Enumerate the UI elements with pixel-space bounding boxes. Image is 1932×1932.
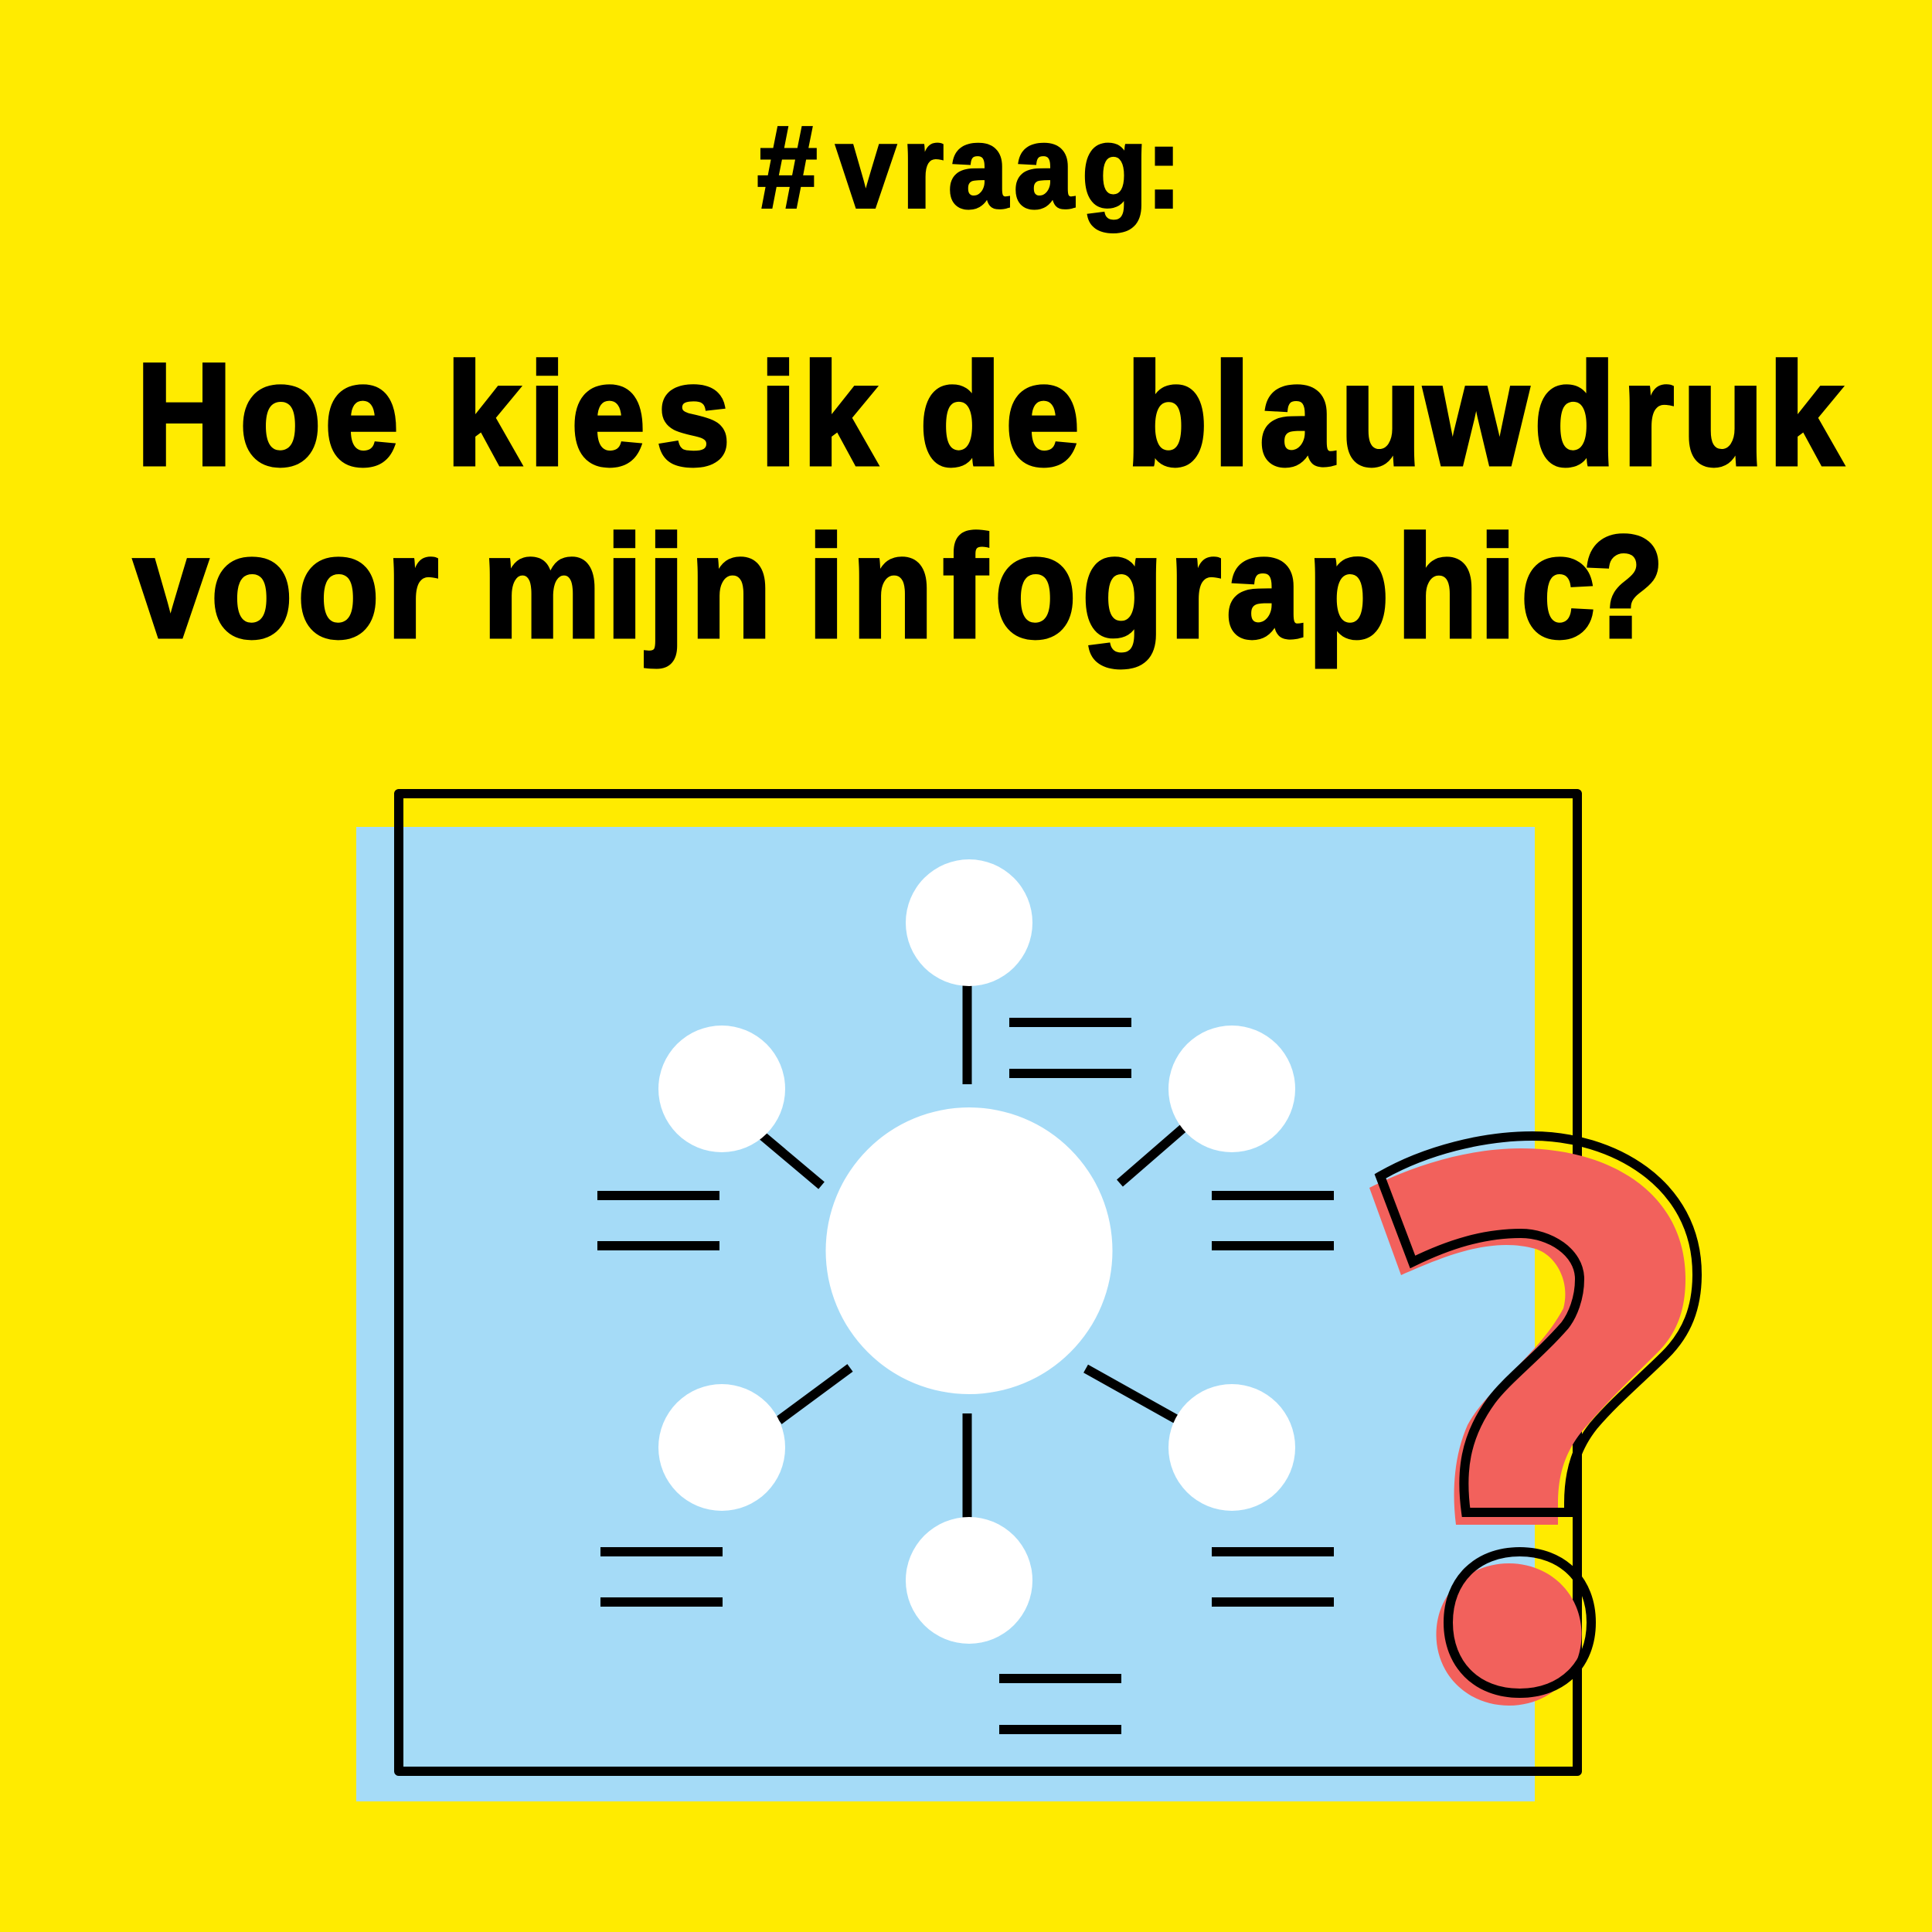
title: voor <box>134 505 438 668</box>
text placeholder bars <box>597 1018 1334 1734</box>
title: kies <box>446 333 730 496</box>
central circle <box>825 1107 1113 1394</box>
panel: blue background square <box>356 827 1535 1801</box>
title: Hoe <box>136 333 399 496</box>
diagram: hub and spoke blueprint <box>597 859 1334 1734</box>
title: infographic? <box>808 505 1665 668</box>
title: blauwdruk <box>1126 333 1843 496</box>
title <box>134 333 1843 668</box>
question mark black outline <box>1380 1136 1697 1693</box>
frame: black outline square <box>399 794 1577 1771</box>
title: de <box>920 333 1080 496</box>
icon: question mark <box>1369 1136 1697 1706</box>
connector lines <box>763 985 1184 1518</box>
heading: hashtag: #vraag: <box>757 102 1182 232</box>
title: mijn <box>482 505 772 668</box>
question mark coral fill <box>1369 1148 1685 1706</box>
satellite circles <box>658 859 1295 1644</box>
title: ik <box>760 333 877 496</box>
